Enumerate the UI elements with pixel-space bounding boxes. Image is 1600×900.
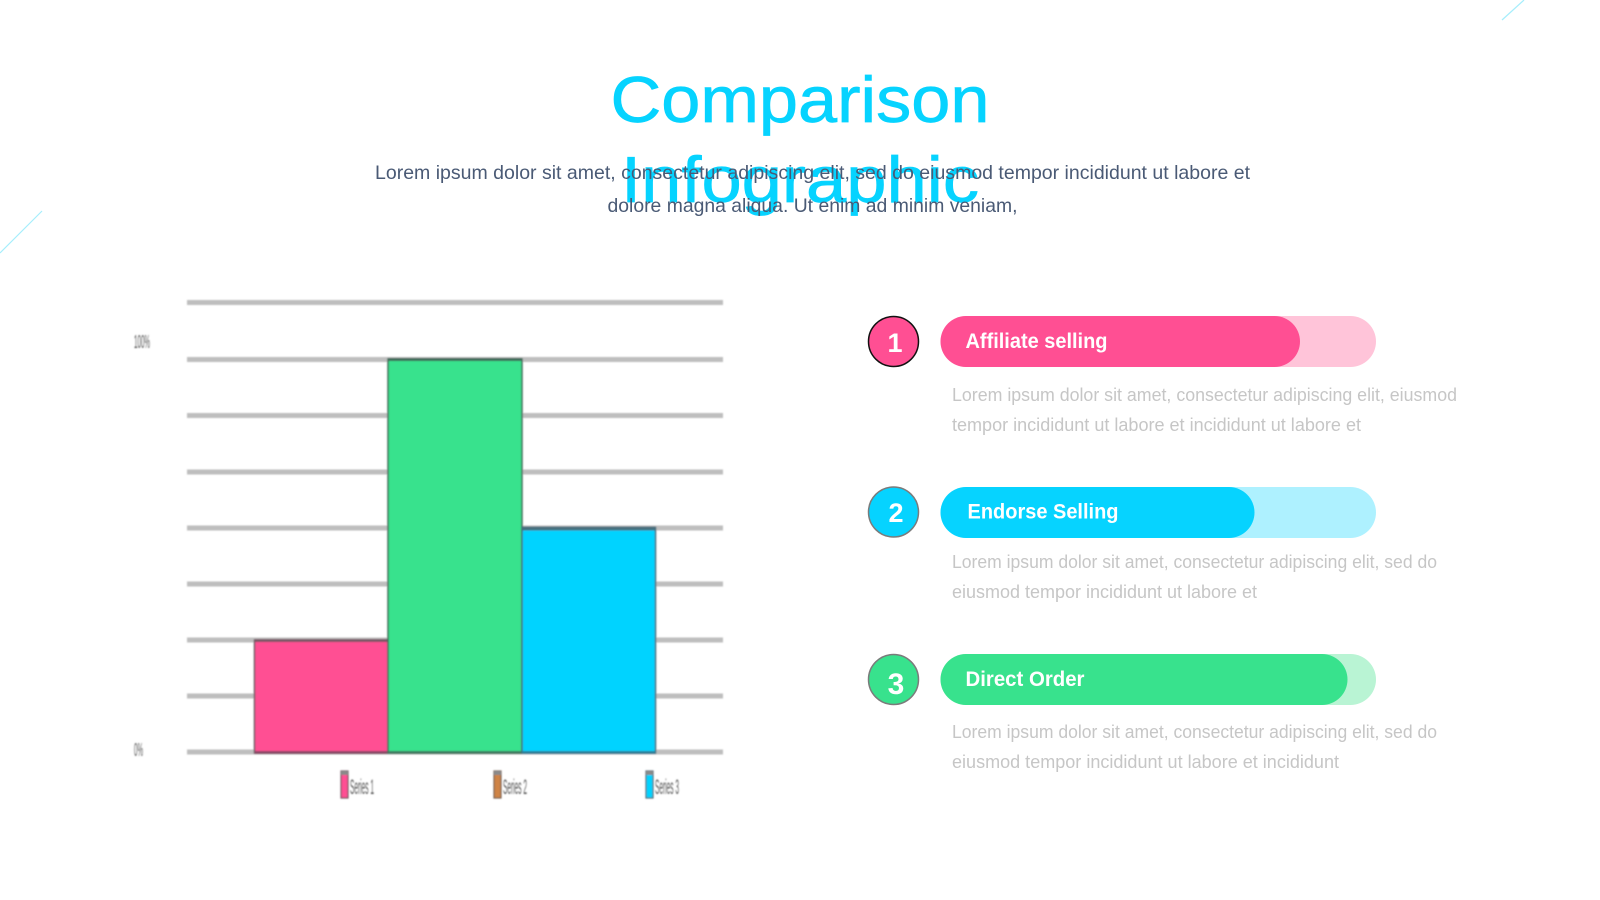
description 1 (952, 385, 1457, 435)
bar chart: Series 3 (655, 776, 679, 799)
item 3: direct order (868, 654, 1437, 772)
description 2: Lorem ipsum dolor sit amet, consectetur adipiscing elit, sed do (952, 552, 1437, 572)
description 1: Lorem ipsum dolor sit amet, consectetur adipiscing elit, eiusmod (952, 385, 1457, 405)
number badge 1: 1 (887, 328, 903, 358)
bar chart: Series 2 (503, 776, 527, 799)
progress pill 3: Direct Order (966, 668, 1084, 691)
number badge 3 (868, 654, 918, 704)
progress pill 2 (940, 487, 1376, 538)
title (610, 63, 990, 216)
subtitle text: dolore magna aliqua. Ut enim ad minim veniam, (608, 195, 1018, 217)
bar: series 1 (254, 639, 388, 754)
title: Infographic (621, 143, 979, 216)
progress pill 1: Affiliate selling (966, 330, 1108, 353)
progress pill 1 (940, 316, 1376, 367)
bar chart: Series 1 (350, 776, 374, 799)
description 3 (952, 722, 1437, 772)
number badge 1 (868, 316, 918, 366)
subtitle text: Lorem ipsum dolor sit amet, consectetur adipiscing elit, sed do eiusmod tempor incididunt ut labore et (375, 162, 1251, 184)
bar: series 2 (388, 358, 522, 754)
description 3: Lorem ipsum dolor sit amet, consectetur adipiscing elit, sed do (952, 722, 1437, 742)
bar chart (134, 300, 723, 799)
item 2: endorse selling (868, 487, 1437, 602)
progress pill 2: Endorse Selling (968, 500, 1118, 524)
number badge 2: 2 (888, 498, 904, 528)
progress pill 3 (940, 654, 1376, 705)
bar chart: 0% (134, 740, 143, 760)
bar chart: 100% (134, 332, 150, 352)
legend: series 3 (646, 771, 679, 799)
title: Comparison (610, 63, 990, 136)
description 2: eiusmod tempor incididunt ut labore et (952, 582, 1257, 602)
legend: series 2 (494, 771, 527, 799)
description 1: tempor incididunt ut labore et incididunt ut labore et (952, 415, 1361, 435)
bar: series 3 (522, 526, 656, 754)
item 1: affiliate selling (868, 316, 1457, 435)
legend: series 1 (341, 771, 374, 799)
number badge 2 (868, 487, 918, 537)
subtitle text (375, 162, 1251, 217)
description 2 (952, 552, 1437, 602)
number badge 3: 3 (888, 668, 904, 701)
description 3: eiusmod tempor incididunt ut labore et incididunt (952, 752, 1339, 772)
